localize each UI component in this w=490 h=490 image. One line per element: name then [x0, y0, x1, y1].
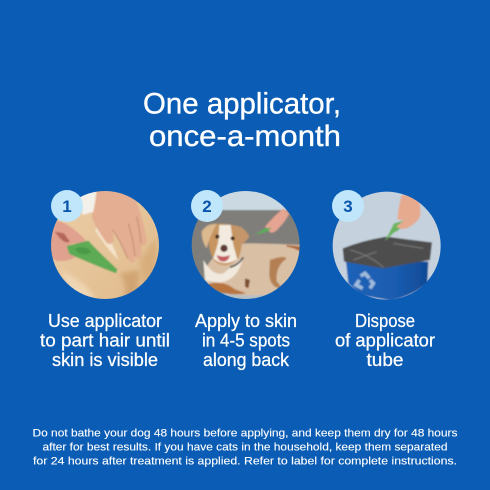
panel: step 3 image: [330, 190, 443, 303]
footnote: after for best results. If you have cats in the household, keep them separated: [42, 442, 448, 454]
caption: step 2: [195, 311, 297, 370]
badge 1: 1: [62, 197, 72, 216]
panel: step 2 image: [192, 191, 300, 299]
caption: step 1: Use applicator: [48, 311, 162, 331]
wall: [220, 191, 288, 211]
title: [143, 88, 341, 153]
hand: [396, 195, 421, 229]
hand right: [92, 190, 147, 262]
badge 2: [191, 190, 223, 222]
badge 3: 3: [343, 197, 353, 216]
caption: step 3: of applicator: [335, 330, 435, 350]
caption: step 1: skin is visible: [52, 350, 158, 370]
caption: step 3: Dispose: [355, 311, 415, 331]
applicator: [254, 228, 272, 235]
caption: step 3: [335, 311, 435, 370]
badge 2: 2: [202, 197, 212, 216]
sofa: [192, 209, 300, 294]
applicator: [67, 241, 117, 273]
panel: step 1 image: [51, 191, 159, 299]
applicator: [385, 220, 406, 241]
hand: [265, 208, 289, 233]
badge 1: [51, 190, 83, 222]
footnote: [32, 428, 458, 468]
recycle icon: [356, 273, 373, 288]
title: One applicator,: [143, 88, 341, 120]
caption: step 2: along back: [203, 350, 290, 370]
bin: [346, 262, 428, 301]
badge 3: [332, 190, 364, 222]
backdrop: [330, 190, 443, 303]
caption: step 1: to part hair until: [40, 330, 170, 350]
hand left: [49, 221, 86, 261]
footnote: for 24 hours after treatment is applied. Refer to label for complete instructions.: [33, 456, 457, 468]
caption: step 3: tube: [366, 350, 404, 370]
caption: step 1: [40, 311, 170, 370]
fur background: [52, 191, 159, 299]
dog head: [208, 224, 242, 265]
eyes: [215, 235, 219, 239]
bin bag: [343, 237, 432, 268]
dog chest: [203, 257, 243, 283]
ears: [202, 224, 217, 248]
caption: step 2: Apply to skin: [195, 311, 297, 331]
collar: [230, 257, 243, 267]
title: once-a-month: [149, 120, 341, 153]
nose and mouth: [220, 245, 228, 252]
caption: step 2: in 4-5 spots: [202, 330, 290, 350]
footnote: Do not bathe your dog 48 hours before applying, and keep them dry for 48 hours: [32, 428, 458, 440]
dog body: [204, 243, 301, 295]
